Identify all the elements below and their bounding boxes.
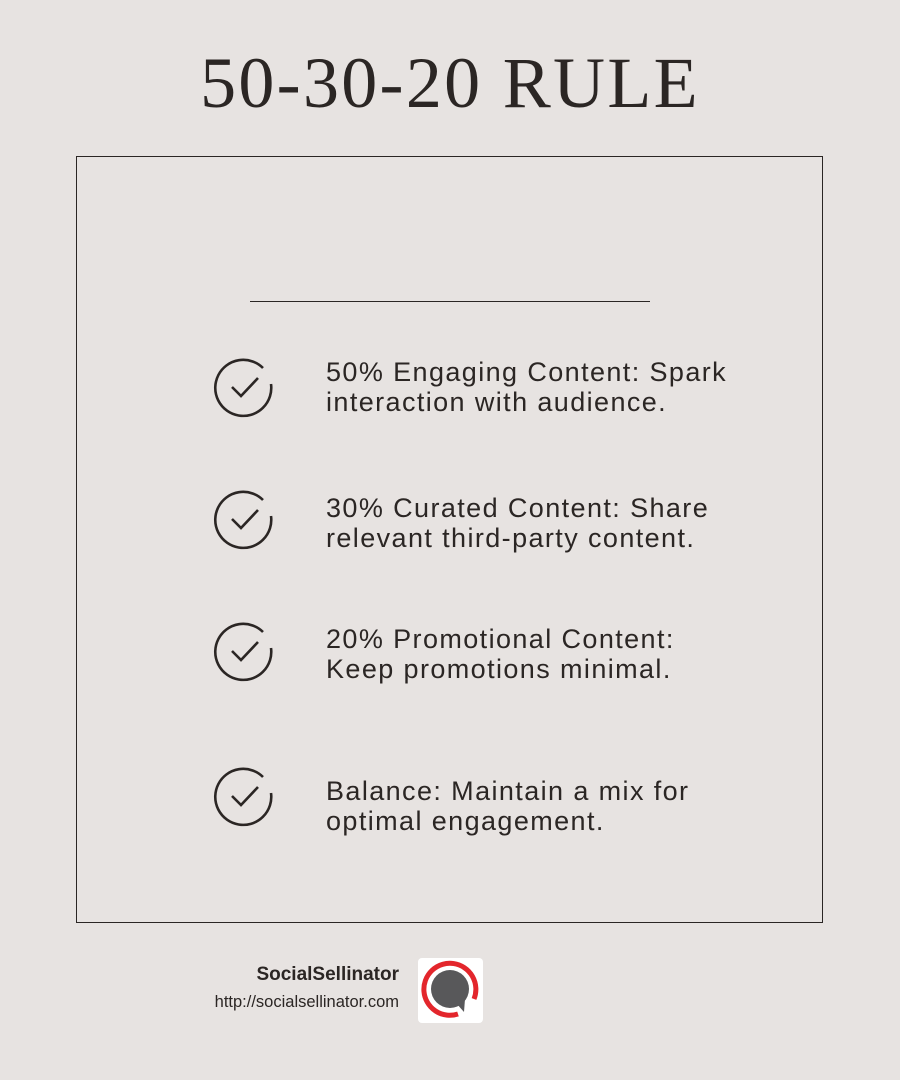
icon: check 3 — [214, 622, 273, 682]
text: promotional — [326, 624, 675, 684]
footer brand text: http://socialsellinator.com — [215, 993, 399, 1011]
icon: check 4 — [214, 768, 273, 826]
text: promotional: Keep promotions minimal. — [326, 654, 672, 684]
text: curated: 30% Curated Content: Share — [326, 493, 709, 523]
text: curated: relevant third-party content. — [326, 523, 695, 553]
text: balance: optimal engagement. — [326, 806, 605, 836]
title: 50-30-20 RULE — [200, 43, 700, 123]
icon: check 2 — [214, 490, 273, 550]
text: curated — [326, 493, 709, 553]
text: engaging: interaction with audience. — [326, 387, 667, 417]
panel: rules — [76, 156, 823, 923]
icon: check 1 — [214, 358, 273, 418]
text: balance: Balance: Maintain a mix for — [326, 776, 689, 806]
text: engaging: 50% Engaging Content: Spark — [326, 357, 727, 387]
text: promotional: 20% Promotional Content: — [326, 624, 675, 654]
logo — [418, 958, 483, 1023]
text: engaging — [326, 357, 727, 417]
text: balance — [326, 776, 689, 836]
footer brand text — [215, 964, 399, 1011]
footer brand text: SocialSellinator — [256, 964, 399, 985]
